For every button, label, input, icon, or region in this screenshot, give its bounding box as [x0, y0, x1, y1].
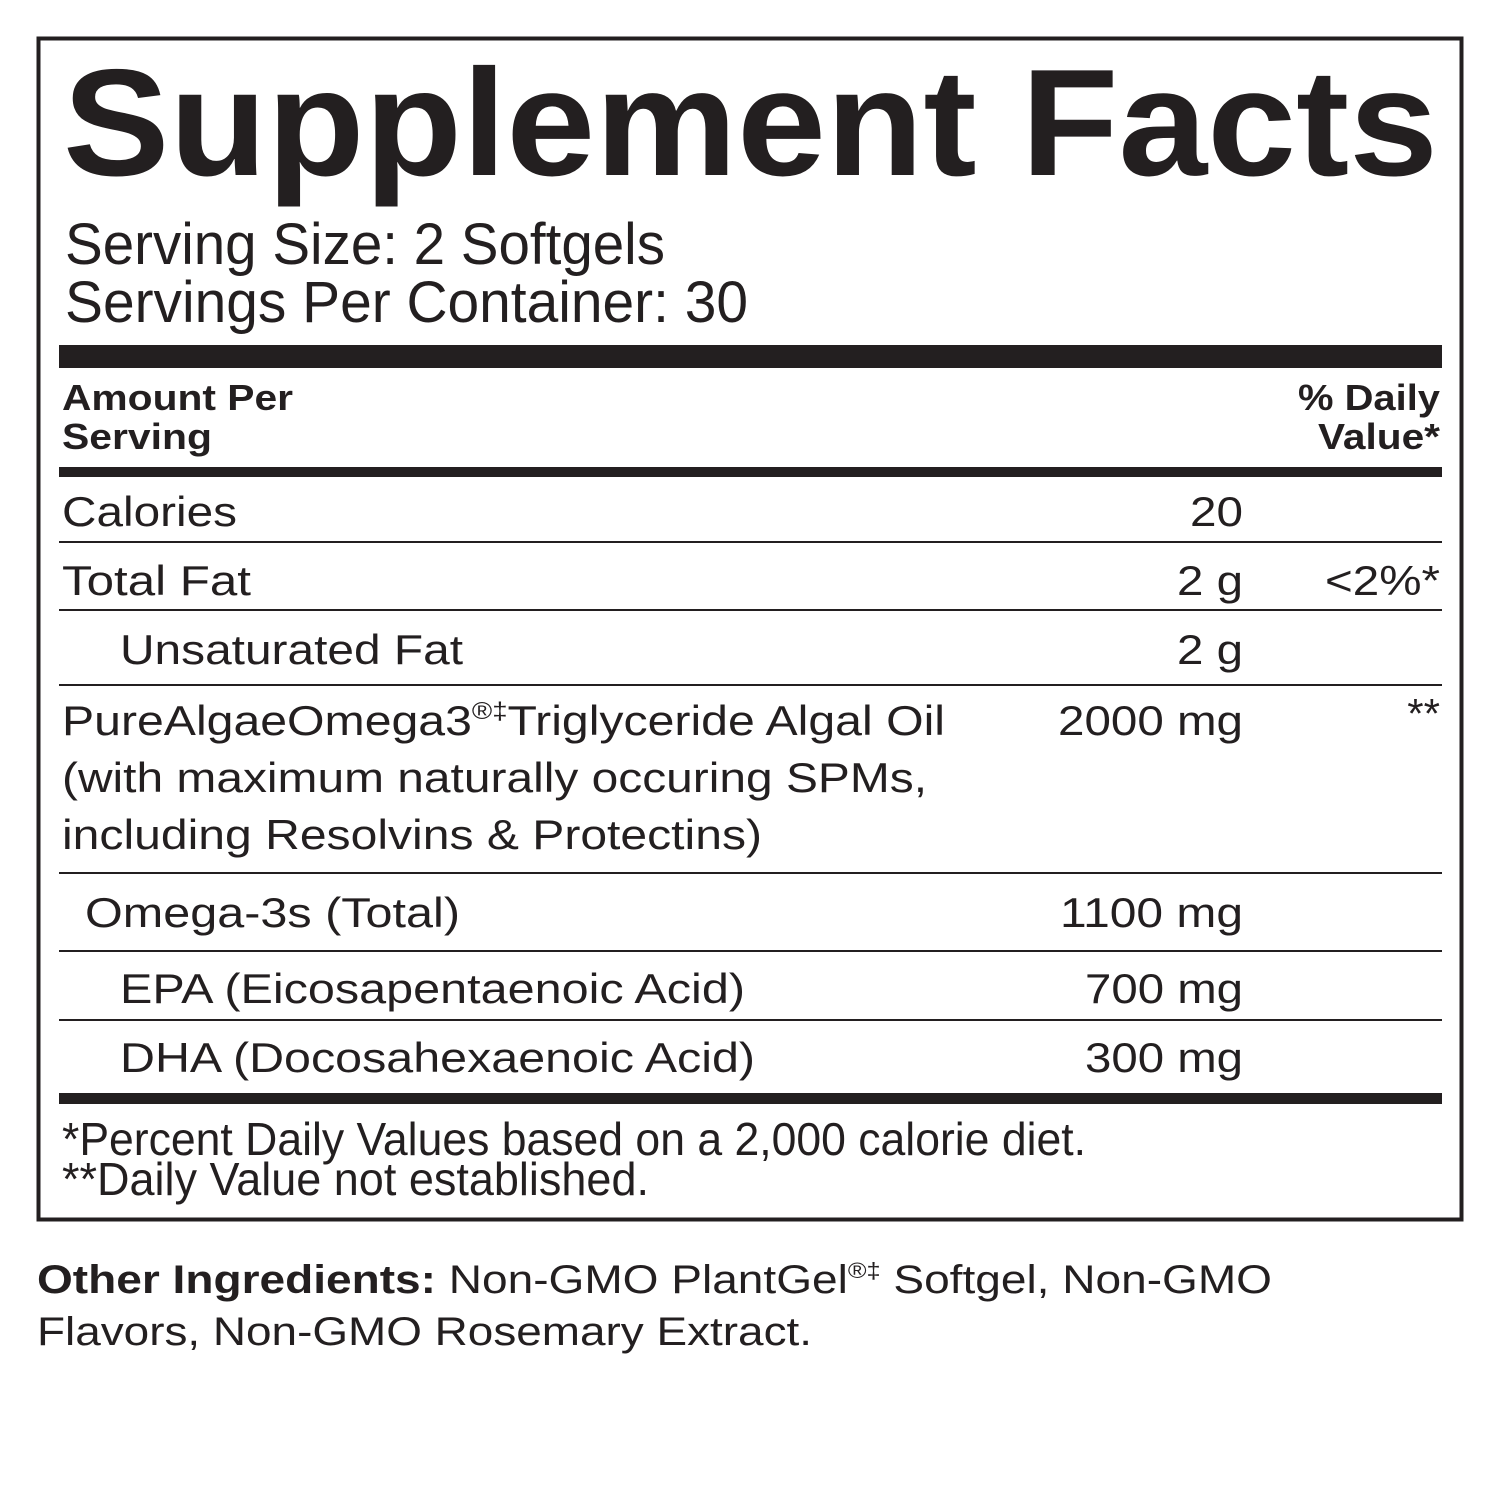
nutrient table: EPA (Eicosapentaenoic Acid) [120, 965, 745, 1012]
nutrient table: 2 g [1177, 557, 1243, 604]
nutrient table: Unsaturated Fat [120, 626, 463, 673]
serving info [65, 212, 748, 335]
footnotes: **Daily Value not established. [62, 1153, 649, 1205]
column headers: % Daily [1298, 377, 1440, 418]
footnotes [62, 1113, 1086, 1205]
other ingredients: Softgel, Non-GMO [881, 1258, 1272, 1302]
nutrient table: ** [1407, 690, 1440, 737]
serving info: Serving Size: 2 Softgels [65, 212, 665, 277]
nutrient table: Omega-3s (Total) [85, 889, 460, 936]
nutrient table: Triglyceride Algal Oil [508, 697, 945, 744]
nutrient table: 1100 mg [1060, 889, 1243, 936]
nutrient table: (with maximum naturally occuring SPMs, [62, 754, 927, 801]
nutrient table [59, 488, 1442, 1081]
other ingredients: Flavors, Non-GMO Rosemary Extract. [37, 1310, 812, 1354]
other ingredients [37, 1258, 1272, 1354]
other ingredients: Other Ingredients: Non-GMO PlantGel [37, 1258, 794, 1302]
nutrient table: Calories [62, 488, 237, 535]
nutrient table: DHA (Docosahexaenoic Acid) [120, 1034, 755, 1081]
footnotes: *Percent Daily Values based on a 2,000 calorie diet. [62, 1113, 1086, 1165]
nutrient table: 700 mg [1085, 965, 1243, 1012]
other ingredients: ®‡ [848, 1258, 881, 1283]
column headers [62, 377, 1440, 457]
column headers: Serving [62, 416, 212, 457]
nutrient table: 20 [1190, 488, 1243, 535]
nutrient table: 2 g [1177, 626, 1243, 673]
nutrient table: 2000 mg [1058, 697, 1243, 744]
serving info: Servings Per Container: 30 [65, 270, 748, 335]
nutrient table: 300 mg [1085, 1034, 1243, 1081]
title: Supplement Facts [63, 38, 1438, 208]
nutrient table: <2%* [1325, 557, 1440, 604]
nutrient table: Total Fat [62, 557, 251, 604]
nutrient table: including Resolvins & Protectins) [62, 811, 762, 858]
column headers: Amount Per [62, 377, 293, 418]
nutrient table: PureAlgaeOmega3 [62, 697, 419, 744]
nutrient table: ®‡ [472, 698, 508, 725]
panel: supplement facts box [38, 38, 1462, 1220]
column headers: Value* [1318, 416, 1440, 457]
